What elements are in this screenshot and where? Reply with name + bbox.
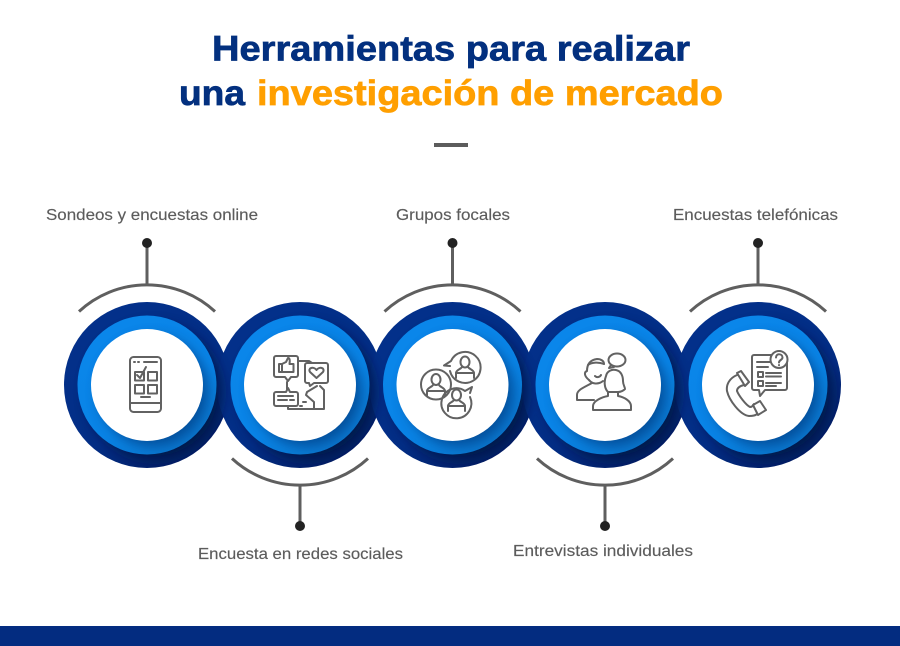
label: Encuestas telefónicas: Encuestas telefónicas (673, 207, 838, 224)
title (179, 30, 723, 113)
connector: Encuestas telefónicas (690, 238, 826, 312)
connector: Sondeos y encuestas online (79, 238, 215, 312)
circle chain (64, 302, 841, 468)
label: Sondeos y encuestas online: Sondeos y encuestas online (46, 207, 258, 224)
icon: interview between two people (577, 354, 631, 410)
label: Grupos focales: Grupos focales (396, 207, 510, 224)
icon: focus group of people in bubbles (421, 352, 481, 418)
title divider (434, 143, 468, 147)
title: Herramientas para realizar (212, 30, 690, 68)
label: Encuesta en redes sociales: Encuesta en redes sociales (198, 546, 403, 563)
connector: Grupos focales (384, 238, 520, 312)
label: Entrevistas individuales: Entrevistas individuales (513, 543, 693, 560)
icon: phone call with questionnaire (727, 351, 788, 416)
title: investigación de mercado (257, 74, 723, 113)
icon: social media bubbles (274, 356, 328, 409)
connector: Entrevistas individuales (537, 458, 673, 531)
icon: phone with survey checklist (130, 357, 161, 412)
title: una (179, 74, 246, 113)
footer bar (0, 626, 900, 646)
connector: Encuesta en redes sociales (232, 458, 368, 531)
